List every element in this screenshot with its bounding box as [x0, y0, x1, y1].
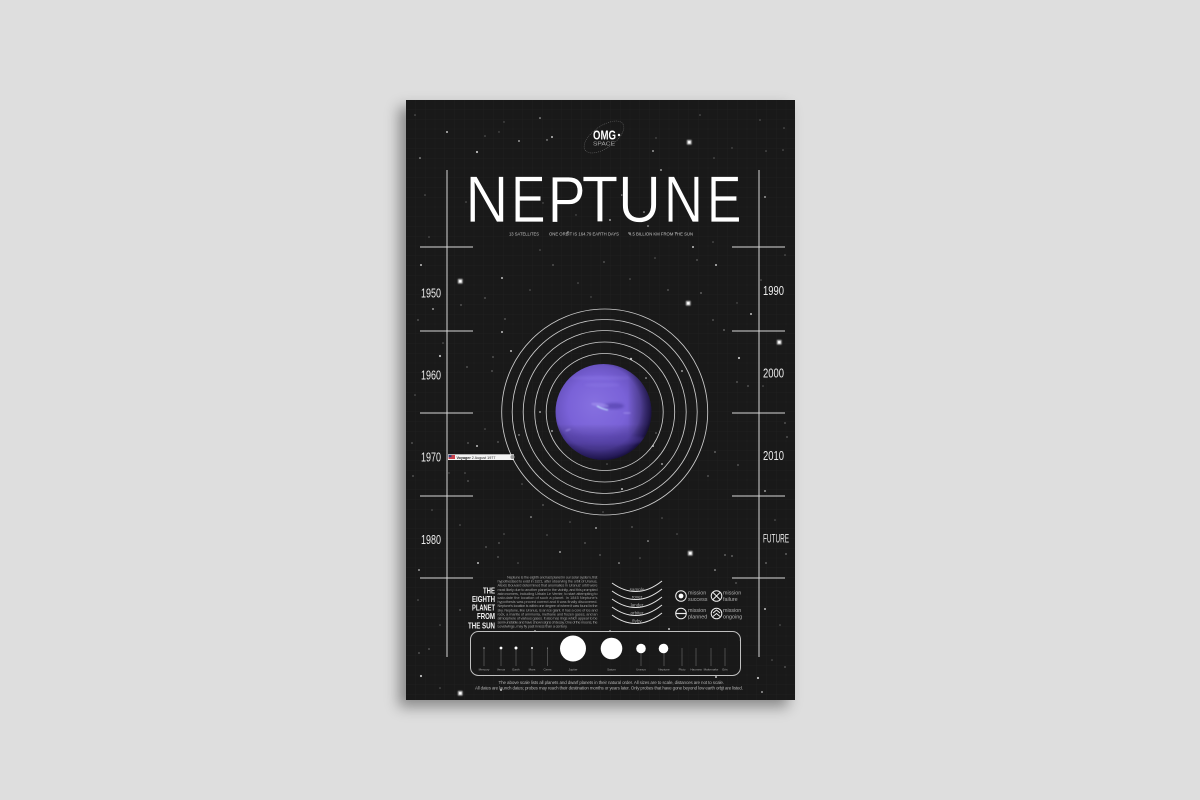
title: E [707, 163, 742, 236]
heading: the eighth planet from the sun: THE SUN [468, 620, 495, 630]
description paragraph: hypothesised to exist in 1821, after observing the orbit of Uranus, [498, 579, 598, 584]
mission type stack: sample [630, 587, 645, 592]
planet names: Mars [529, 668, 536, 672]
mission type stack [612, 581, 662, 624]
planet names: Eris [722, 668, 728, 672]
legend item: mission failure: failure [723, 597, 738, 603]
legend item: mission failure: mission [723, 590, 741, 596]
logo: OMG Space: OMG [593, 128, 616, 142]
title: U [618, 163, 661, 236]
timeline: 1990 to future: 2000 [763, 366, 784, 380]
description paragraph: semi-unstable and have shown signs of decay. One of the moons, the [498, 620, 598, 625]
timeline: 1950 to 1980: 1950 [421, 285, 441, 300]
legend: mission status [676, 590, 742, 620]
mission marker: Voyager 2: Voyager 2 August 1977 [456, 456, 495, 460]
title: E [511, 163, 546, 236]
planet names: Earth [512, 668, 520, 672]
key facts [509, 232, 693, 236]
icon: US flag [448, 455, 455, 459]
legend item: mission success [676, 590, 708, 603]
background grid [406, 100, 795, 700]
description paragraph: Neptune's location is within one degree of where it was found in the [498, 603, 598, 608]
title: N [465, 163, 508, 236]
timeline: 1990 to future [732, 170, 789, 657]
legend item: mission failure [711, 590, 741, 603]
heading: the eighth planet from the sun: THE [483, 585, 495, 595]
legend item: mission ongoing: mission [723, 608, 741, 614]
planet names: Makemake [704, 668, 719, 672]
legend item: mission ongoing [711, 608, 742, 620]
legend item: mission success: success [688, 597, 708, 603]
heading: the eighth planet from the sun: PLANET [472, 602, 496, 612]
description paragraph: most likely due to another planet in the vicinity, and this prompted [498, 587, 598, 592]
logo: OMG Space: SPACE [593, 142, 615, 148]
planet discs [483, 636, 668, 662]
key facts: 13 SATELLITES [509, 232, 539, 236]
planet names: Uranus [636, 668, 646, 672]
title: T [582, 163, 618, 236]
scale lines [484, 648, 725, 666]
mission type stack: orbiter [630, 610, 644, 616]
timeline: 1990 to future: FUTURE [763, 534, 789, 546]
planet names: Saturn [607, 668, 616, 672]
planet names: Pluto [679, 668, 686, 672]
heading: the eighth planet from the sun [468, 585, 496, 630]
planet names: Haumea [690, 668, 702, 672]
legend item: mission planned: planned [688, 614, 707, 620]
timeline: 1990 to future: 1990 [763, 283, 784, 298]
description paragraph [498, 574, 598, 629]
planet names: Venus [497, 668, 506, 672]
timeline: 1950 to 1980: 1980 [421, 532, 441, 547]
planet names [479, 668, 728, 672]
description paragraph: hypothesis was proved correct and it was finally discovered. [498, 599, 598, 604]
planet Neptune [550, 364, 652, 461]
legend item: mission planned [676, 608, 707, 620]
title: N [664, 163, 703, 236]
timeline: 1950 to 1980 [420, 170, 473, 657]
logo: OMG Space [579, 115, 629, 159]
description paragraph: Alexis Bouvard determined that anomalies in Uranus' orbit were [498, 583, 598, 588]
title: P [548, 163, 586, 236]
mission type stack: rover [632, 594, 643, 600]
key facts: 4.5 BILLION KM FROM THE SUN [629, 232, 693, 236]
description paragraph: sky. Neptune, like Uranus, is an ice giant. It has a core of ice and [498, 607, 598, 612]
mission marker: Voyager 2 [448, 454, 514, 460]
footnote [475, 680, 743, 690]
description paragraph: Neptune is the eighth and last planet in our solar system, first [507, 574, 598, 580]
poster background [406, 100, 795, 700]
orbit rings [502, 309, 708, 515]
mission type stack: lander [631, 602, 644, 608]
planet names: Ceres [543, 668, 552, 672]
description paragraph: rock, a mantle of ammonia, methane and frozen gases, and an [498, 611, 598, 616]
legend item: mission ongoing: ongoing [723, 614, 742, 620]
description paragraph: atmosphere of various gases. It also has rings which appear to be [498, 616, 598, 620]
planet names: Neptune [658, 668, 670, 672]
legend item: mission planned: mission [688, 608, 706, 614]
description paragraph: calculate the location of such a planet. In 1845 Neptune's [498, 595, 598, 600]
heading: the eighth planet from the sun: FROM [477, 611, 495, 621]
mission type stack: flyby [632, 618, 642, 624]
footnote: The above scale lists all planets and dwarf planets in their natural order. All sizes are to scale, distances are not to scale. [498, 680, 724, 685]
timeline: 1950 to 1980: 1970 [421, 450, 441, 465]
solar system scale panel [470, 632, 740, 676]
footnote: All dates are launch dates; probes may reach their destination months or years later. Only probes that have gone beyond low earth orbit are listed. [475, 686, 743, 690]
description paragraph: astronomers, including Urbain Le Verrier, to start attempting to [498, 591, 598, 596]
description paragraph: Levelwinge, may fly past in less than a century. [498, 624, 568, 629]
planet names: Mercury [479, 668, 490, 672]
key facts: ONE ORBIT IS 164.79 EARTH DAYS [549, 232, 619, 236]
title [465, 163, 742, 236]
heading: the eighth planet from the sun: EIGHTH [472, 594, 495, 604]
timeline: 1990 to future: 2010 [763, 448, 784, 463]
timeline: 1950 to 1980: 1960 [421, 367, 441, 382]
starfield [411, 114, 788, 695]
legend item: mission success: mission [688, 590, 706, 596]
planet names: Jupiter [568, 668, 578, 672]
